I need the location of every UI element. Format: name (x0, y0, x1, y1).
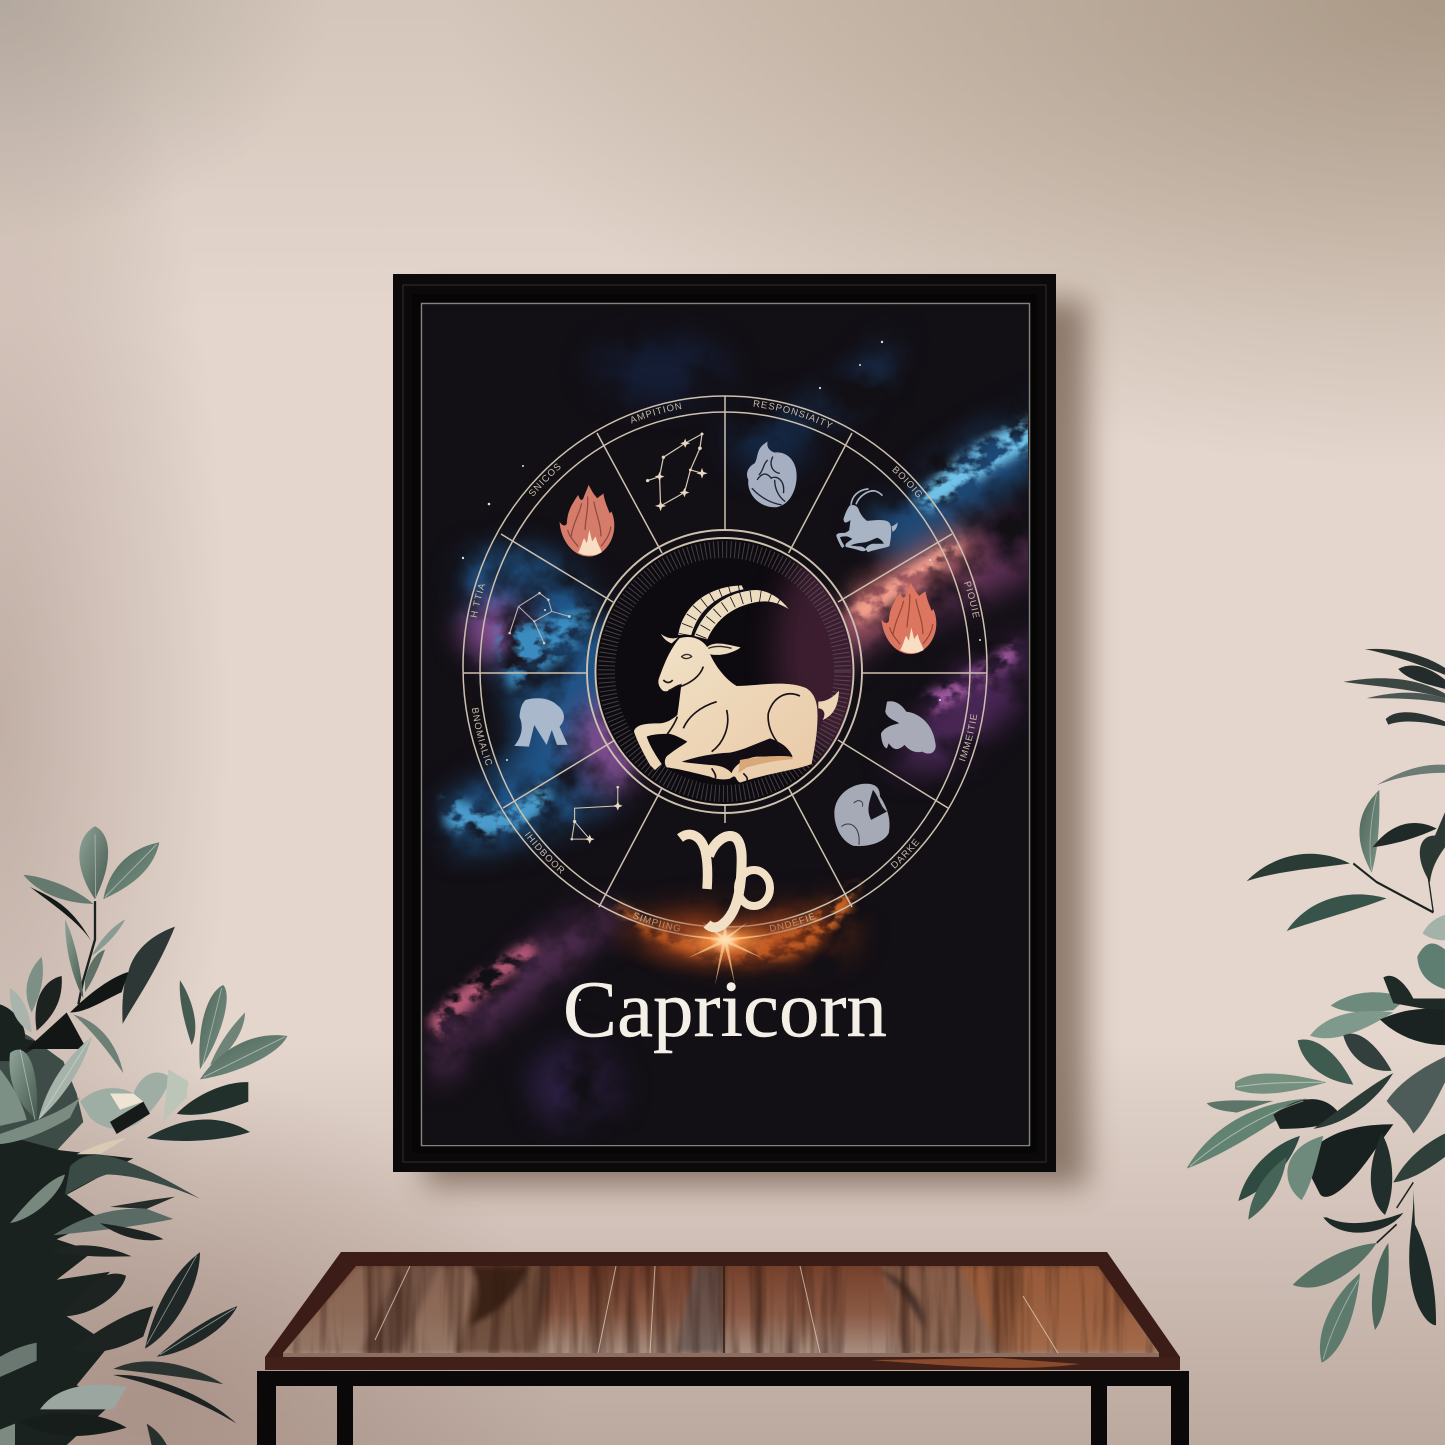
table top rim (265, 1252, 1180, 1370)
poster artwork (423, 305, 1028, 1145)
nebula clouds (420, 325, 1040, 1125)
curved wheel labels: RESPONSIAITY (754, 400, 833, 428)
icon: capricorn sign (680, 834, 770, 927)
icon: constellation top (646, 433, 708, 511)
curved wheel labels: SNICOS (529, 464, 560, 496)
leaf midribs (20, 834, 285, 1355)
goat contour lines (663, 667, 800, 782)
curved wheel labels (470, 400, 980, 932)
curved wheel labels: H TTIA (470, 584, 486, 618)
black picture frame (393, 274, 1056, 1172)
right plant (1187, 649, 1445, 1363)
icon: grey horse (881, 701, 936, 754)
goat tail (818, 691, 839, 720)
icon: grey twin figures (514, 698, 568, 747)
curved wheel labels: IHIDBOOR (525, 832, 564, 874)
stars (462, 341, 981, 1001)
table front edge (265, 1357, 1180, 1370)
table metal base (257, 1371, 1189, 1445)
icon: grey curled creature (834, 784, 890, 846)
goat belly gap and rear leg (682, 738, 793, 773)
central disc (596, 541, 852, 802)
curved wheel labels: SIMPIING (633, 912, 680, 932)
curved wheel labels: DARKE (890, 838, 920, 869)
curved wheel labels: BOIOIG (892, 466, 922, 498)
icon: constellation lower (571, 786, 623, 844)
wooden table (257, 1252, 1189, 1445)
icon: constellation left (508, 592, 571, 644)
poster background (423, 305, 1028, 1145)
stems and midribs (1377, 877, 1433, 1243)
central goat emblem (634, 585, 839, 783)
left plant (0, 826, 287, 1445)
dark foliage mass (0, 1004, 133, 1445)
curved wheel labels: AMPITION (632, 402, 682, 424)
goat horns (678, 585, 789, 639)
curved wheel labels: BNOMIALIC (472, 708, 492, 766)
title: Capricorn (563, 964, 887, 1054)
goat body (634, 637, 818, 783)
table wood planks (283, 1266, 1159, 1353)
curved wheel labels: PIOUIE (964, 581, 980, 618)
icon: grey water swirl (747, 442, 797, 507)
table surface (283, 1266, 1159, 1353)
goat ears (661, 634, 678, 643)
zodiac wheel rings and spokes (463, 396, 987, 938)
frame shadow on wall (425, 300, 1087, 1186)
icon: fire right (882, 582, 936, 654)
icon: small grey goat (836, 489, 898, 552)
curved wheel labels: IMMEITIE (959, 714, 978, 762)
back foliage layer (0, 1021, 83, 1154)
icon: fire left (560, 485, 614, 556)
curved wheel labels: DNDEFIE (770, 912, 816, 932)
orange star burst (620, 904, 830, 984)
